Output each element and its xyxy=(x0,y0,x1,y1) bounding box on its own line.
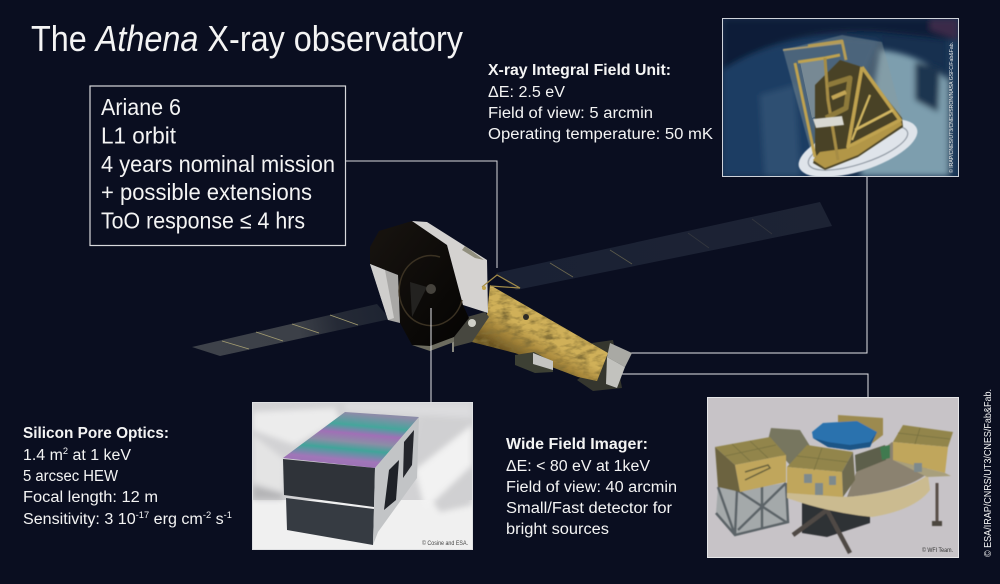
credit: overall image rights: © ESA/IRAP/CNRS/UT3/CNES/Fab&Fab. xyxy=(982,389,994,557)
text block: X-ray Integral Field Unit: X-ray Integral Field Unit: xyxy=(488,62,671,79)
glove shapes xyxy=(253,403,472,512)
text block: Silicon Pore Optics: s xyxy=(211,511,224,528)
text block: Wide Field Imager: Small/Fast detector for xyxy=(506,500,672,517)
glass cryostat xyxy=(783,34,885,148)
panel: mission summary box xyxy=(90,86,346,246)
text block: Silicon Pore Optics: 2 xyxy=(63,446,68,456)
text block: Silicon Pore Optics: erg cm xyxy=(149,511,203,528)
hood white panel top xyxy=(412,221,488,313)
deployment bracket xyxy=(482,275,520,288)
support legs xyxy=(793,510,850,553)
connector: optics image to spacecraft xyxy=(430,308,432,402)
text block: Wide Field Imager: Wide Field Imager: xyxy=(506,436,648,453)
solar array: right wing xyxy=(496,202,832,290)
table surface xyxy=(253,500,472,549)
telescope tube xyxy=(472,285,608,381)
bottom plate xyxy=(412,337,454,351)
text block: Silicon Pore Optics: -2 xyxy=(203,510,211,520)
mission duration line: 4 years nominal mission xyxy=(101,151,335,177)
title: The Athena X-ray observatory xyxy=(31,18,463,59)
target of opportunity line: ToO response ≤ 4 hrs xyxy=(101,208,305,234)
connector: mission box to spacecraft xyxy=(346,161,497,268)
telescope aperture xyxy=(399,256,462,326)
blue octagon detector xyxy=(812,421,877,450)
hood white panel lower xyxy=(370,264,400,323)
back gold unit xyxy=(838,415,883,445)
center gold box xyxy=(787,445,853,472)
text block: Wide Field Imager: ΔE: < 80 eV at 1keV xyxy=(506,458,651,475)
text block: Silicon Pore Optics: Silicon Pore Optics: xyxy=(23,425,169,442)
text block: X-ray Integral Field Unit xyxy=(488,62,714,143)
gold instrument frame xyxy=(783,41,903,170)
text block: Wide Field Imager: Field of view: 40 arcmin xyxy=(506,479,677,496)
optics stack xyxy=(283,412,419,545)
dark support block xyxy=(802,500,870,537)
text block: Silicon Pore Optics: -17 xyxy=(136,510,149,520)
text block: X-ray Integral Field Unit: Field of view: 5 arcmin xyxy=(488,105,653,122)
connector: WFI image to spacecraft xyxy=(620,374,868,397)
left gold box xyxy=(715,437,786,465)
image panel: Wide Field Imager xyxy=(707,397,959,558)
text block: Silicon Pore Optics: Sensitivity: 3 10 xyxy=(23,511,132,528)
instrument module dark body xyxy=(577,340,622,391)
grey support stand xyxy=(716,483,788,535)
instrument module panels xyxy=(606,343,632,388)
credit: X-IFU image: © IRAP/CNES/UT3/CNES/SRON/NASA GSFC/Fab&Fab. xyxy=(948,42,955,173)
extensions line: + possible extensions xyxy=(101,179,312,205)
disk ring xyxy=(787,475,930,517)
text block: Silicon Pore Optics: -1 xyxy=(224,510,232,520)
text block: Silicon Pore Optics: at 1 keV xyxy=(68,447,132,464)
text block: X-ray Integral Field Unit: ΔE: 2.5 eV xyxy=(488,84,566,101)
service module xyxy=(451,312,489,352)
credit: optics image: © Cosine and ESA. xyxy=(422,540,468,547)
orbit line: L1 orbit xyxy=(101,122,177,148)
text block: Silicon Pore Optics xyxy=(23,425,232,528)
solar array: left wing xyxy=(192,304,390,356)
text block: Silicon Pore Optics: Focal length: 12 m xyxy=(23,489,158,506)
sunshield black hood xyxy=(370,221,469,350)
text block: X-ray Integral Field Unit: Operating temperature: 50 mK xyxy=(488,126,714,143)
tube side unit xyxy=(515,352,553,373)
image panel: X-IFU instrument xyxy=(722,18,959,189)
mounting ring xyxy=(798,119,918,176)
text block: Silicon Pore Optics: 1.4 m xyxy=(23,447,62,464)
side electronics xyxy=(855,445,886,472)
image panel: Silicon Pore Optics xyxy=(252,402,473,550)
launcher line: Ariane 6 xyxy=(101,94,181,120)
right gold box xyxy=(893,425,953,447)
disk top xyxy=(847,442,928,497)
spacecraft: Athena xyxy=(192,202,832,391)
connector: X-IFU image to spacecraft xyxy=(609,176,867,353)
text block: Silicon Pore Optics: 5 arcsec HEW xyxy=(23,468,118,485)
credit: WFI image: © WFI Team. xyxy=(922,547,953,554)
text block: Wide Field Imager: bright sources xyxy=(506,521,609,538)
text block: Wide Field Imager xyxy=(506,436,677,538)
